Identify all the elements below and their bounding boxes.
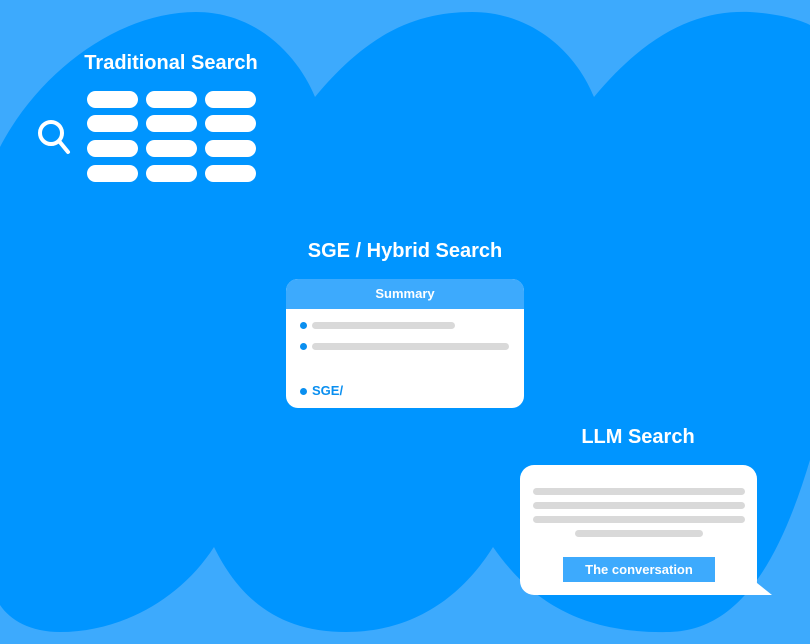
card header: Summary: [375, 286, 435, 301]
button: The conversation: The conversation: [585, 562, 693, 577]
card header: [286, 279, 524, 309]
title: LLM Search: LLM Search: [581, 426, 695, 448]
icon: magnifier: [38, 120, 70, 154]
chat bubble: [520, 465, 772, 595]
panel: summary card: [286, 279, 524, 408]
title: SGE / Hybrid Search: SGE / Hybrid Search: [308, 240, 502, 262]
results grid: [87, 91, 256, 182]
title: Traditional Search: Traditional Search: [84, 52, 258, 74]
button: The conversation: [563, 557, 715, 582]
label: SGE/: SGE/: [312, 383, 343, 398]
